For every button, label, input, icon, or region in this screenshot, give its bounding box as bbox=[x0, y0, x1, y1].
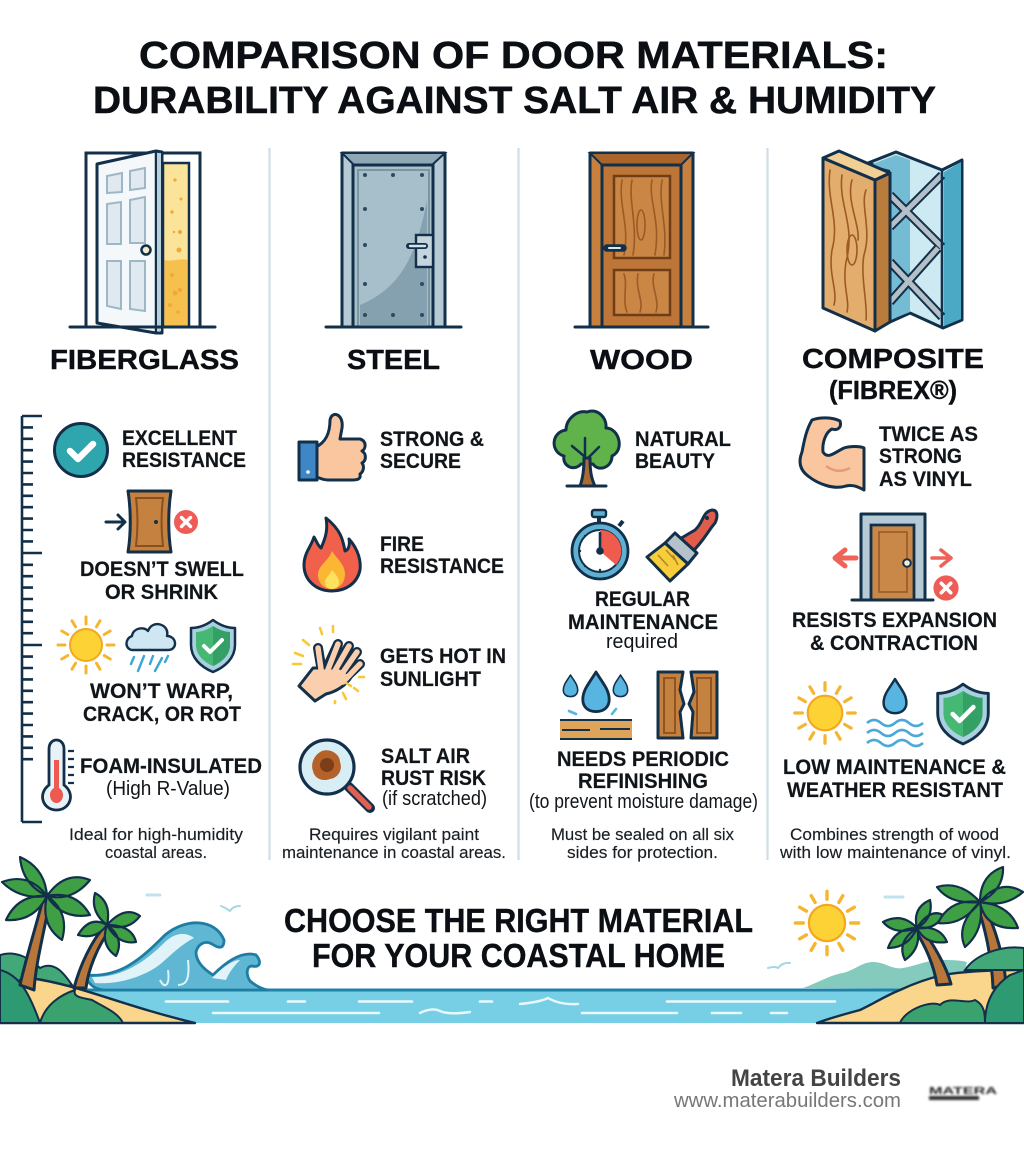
footer: brand bbox=[673, 1065, 901, 1112]
icon: tree bbox=[554, 411, 619, 486]
footer: logo bbox=[929, 1086, 997, 1100]
text: excellent resistance: EXCELLENT bbox=[122, 427, 237, 450]
heading: steel: STEEL bbox=[347, 344, 440, 375]
text: won't warp bbox=[83, 680, 241, 726]
text: gets hot: GETS HOT IN bbox=[380, 645, 506, 668]
text: needs refinishing: (to prevent moisture damage) bbox=[529, 791, 758, 813]
text: low maintenance: LOW MAINTENANCE & bbox=[783, 756, 1006, 779]
icon: cracked wood bbox=[658, 672, 717, 738]
text: low maintenance bbox=[783, 756, 1006, 802]
note: wood: Must be sealed on all six bbox=[551, 825, 734, 844]
text: needs refinishing bbox=[529, 748, 758, 813]
text: fire resistance bbox=[380, 533, 504, 578]
text: regular maintenance: MAINTENANCE bbox=[568, 611, 718, 634]
text: natural beauty: NATURAL bbox=[635, 428, 731, 451]
note: fiberglass bbox=[69, 825, 244, 862]
note: steel: maintenance in coastal areas. bbox=[282, 843, 506, 862]
icon: sun bbox=[58, 617, 114, 673]
icon: steel door bbox=[326, 153, 461, 327]
heading: composite bbox=[802, 343, 984, 405]
text: twice as strong: TWICE AS bbox=[879, 423, 978, 446]
text: resists expansion: RESISTS EXPANSION bbox=[792, 609, 997, 632]
icon: thermometer bbox=[43, 740, 74, 810]
icon: fiberglass door bbox=[70, 151, 215, 333]
icon: sun bbox=[795, 683, 855, 743]
banner: coastal scene bbox=[0, 857, 1024, 1023]
text: strong secure: SECURE bbox=[380, 450, 461, 473]
heading: fiberglass: FIBERGLASS bbox=[50, 344, 239, 375]
text: rust risk bbox=[381, 745, 487, 810]
icon: flexed muscle bbox=[800, 418, 864, 490]
footer: brand: Matera Builders bbox=[731, 1065, 901, 1092]
icon: water bbox=[867, 679, 923, 746]
note: composite bbox=[779, 825, 1011, 862]
note: composite: with low maintenance of vinyl. bbox=[779, 843, 1011, 862]
panel: steel bbox=[282, 153, 506, 862]
text: twice as strong bbox=[879, 423, 978, 491]
palm tree left large bbox=[2, 857, 90, 990]
icon: composite cross section bbox=[823, 151, 962, 331]
icon: moisture drops bbox=[560, 672, 632, 739]
text: gets hot: SUNLIGHT bbox=[380, 668, 481, 691]
note: fiberglass: coastal areas. bbox=[105, 843, 207, 862]
panel: wood bbox=[529, 153, 758, 862]
wave bbox=[85, 923, 268, 990]
note: steel bbox=[282, 825, 506, 862]
heading: composite: COMPOSITE bbox=[802, 343, 984, 374]
text: strong secure: STRONG & bbox=[380, 428, 484, 451]
text: resists expansion: & CONTRACTION bbox=[810, 632, 978, 655]
text: doesn't swell: DOESN’T SWELL bbox=[80, 558, 244, 581]
text: rust risk: SALT AIR bbox=[381, 745, 470, 768]
text: natural beauty bbox=[635, 428, 731, 473]
panel: composite bbox=[779, 151, 1011, 862]
icon: wood door bbox=[575, 153, 708, 327]
text: doesn't swell bbox=[80, 558, 244, 604]
water bbox=[0, 990, 1024, 1023]
heading: composite: (FIBREX®) bbox=[829, 375, 957, 405]
icon: door no swell bbox=[106, 491, 198, 552]
title: DURABILITY AGAINST SALT AIR & HUMIDITY bbox=[93, 80, 936, 122]
palm tree right small bbox=[883, 900, 951, 985]
icon: thumbs up bbox=[299, 414, 365, 480]
banner message bbox=[284, 902, 753, 974]
heading: wood: WOOD bbox=[590, 344, 693, 375]
text: foam insulated bbox=[80, 755, 262, 800]
footer: logo: MATERA bbox=[929, 1086, 997, 1097]
icon: sun bbox=[795, 891, 859, 955]
icon: shield bbox=[191, 620, 235, 672]
text: won't warp: WON’T WARP, bbox=[90, 680, 233, 703]
text: twice as strong: STRONG bbox=[879, 445, 962, 468]
text: won't warp: CRACK, OR ROT bbox=[83, 703, 241, 726]
text: rust risk: RUST RISK bbox=[381, 767, 486, 790]
icon: rain cloud bbox=[126, 624, 175, 671]
banner message: CHOOSE THE RIGHT MATERIAL bbox=[284, 902, 753, 939]
icon: hot hand bbox=[293, 626, 364, 703]
icon: stopwatch bbox=[572, 510, 628, 579]
text: fire resistance: RESISTANCE bbox=[380, 555, 504, 578]
panel: fiberglass bbox=[22, 151, 262, 862]
icon: check badge bbox=[54, 424, 108, 476]
text: gets hot bbox=[380, 645, 506, 691]
note: composite: Combines strength of wood bbox=[790, 825, 999, 844]
text: foam insulated: (High R-Value) bbox=[106, 778, 230, 800]
note: steel: Requires vigilant paint bbox=[309, 825, 479, 844]
text: needs refinishing: REFINISHING bbox=[578, 770, 708, 793]
note: fiberglass: Ideal for high-humidity bbox=[69, 825, 244, 844]
title bbox=[93, 35, 936, 122]
note: wood bbox=[551, 825, 734, 862]
ruler scale bbox=[22, 416, 42, 822]
birds and clouds bbox=[147, 895, 903, 968]
note: wood: sides for protection. bbox=[567, 843, 718, 862]
text: low maintenance: WEATHER RESISTANT bbox=[787, 779, 1003, 802]
text: excellent resistance bbox=[122, 427, 246, 472]
text: fire resistance: FIRE bbox=[380, 533, 424, 556]
icon: door expansion bbox=[835, 514, 959, 601]
icon: paintbrush bbox=[647, 510, 717, 581]
icon: flame bbox=[304, 518, 360, 591]
right bushes bbox=[900, 947, 1024, 1023]
text: needs refinishing: NEEDS PERIODIC bbox=[557, 748, 729, 771]
text: regular maintenance: REGULAR bbox=[595, 588, 690, 611]
text: natural beauty: BEAUTY bbox=[635, 450, 715, 473]
text: excellent resistance: RESISTANCE bbox=[122, 449, 246, 472]
text: foam insulated: FOAM-INSULATED bbox=[80, 755, 262, 778]
text: doesn't swell: OR SHRINK bbox=[105, 581, 218, 604]
footer: brand: www.materabuilders.com bbox=[673, 1090, 901, 1112]
banner message: FOR YOUR COASTAL HOME bbox=[312, 937, 725, 974]
text: twice as strong: AS VINYL bbox=[879, 468, 972, 491]
palm tree right large bbox=[937, 867, 1023, 988]
text: strong secure bbox=[380, 428, 484, 473]
right hills bbox=[803, 960, 967, 989]
right sand bbox=[817, 970, 1024, 1023]
title: COMPARISON OF DOOR MATERIALS: bbox=[139, 35, 888, 77]
text: rust risk: (if scratched) bbox=[382, 788, 487, 810]
text: regular maintenance: required bbox=[606, 631, 678, 653]
text: regular maintenance bbox=[568, 588, 718, 653]
icon: shield bbox=[938, 684, 988, 744]
text: resists expansion bbox=[792, 609, 997, 655]
palm tree left small bbox=[74, 893, 140, 988]
icon: rust magnifier bbox=[300, 740, 370, 808]
left hills and sand bbox=[0, 953, 195, 1023]
